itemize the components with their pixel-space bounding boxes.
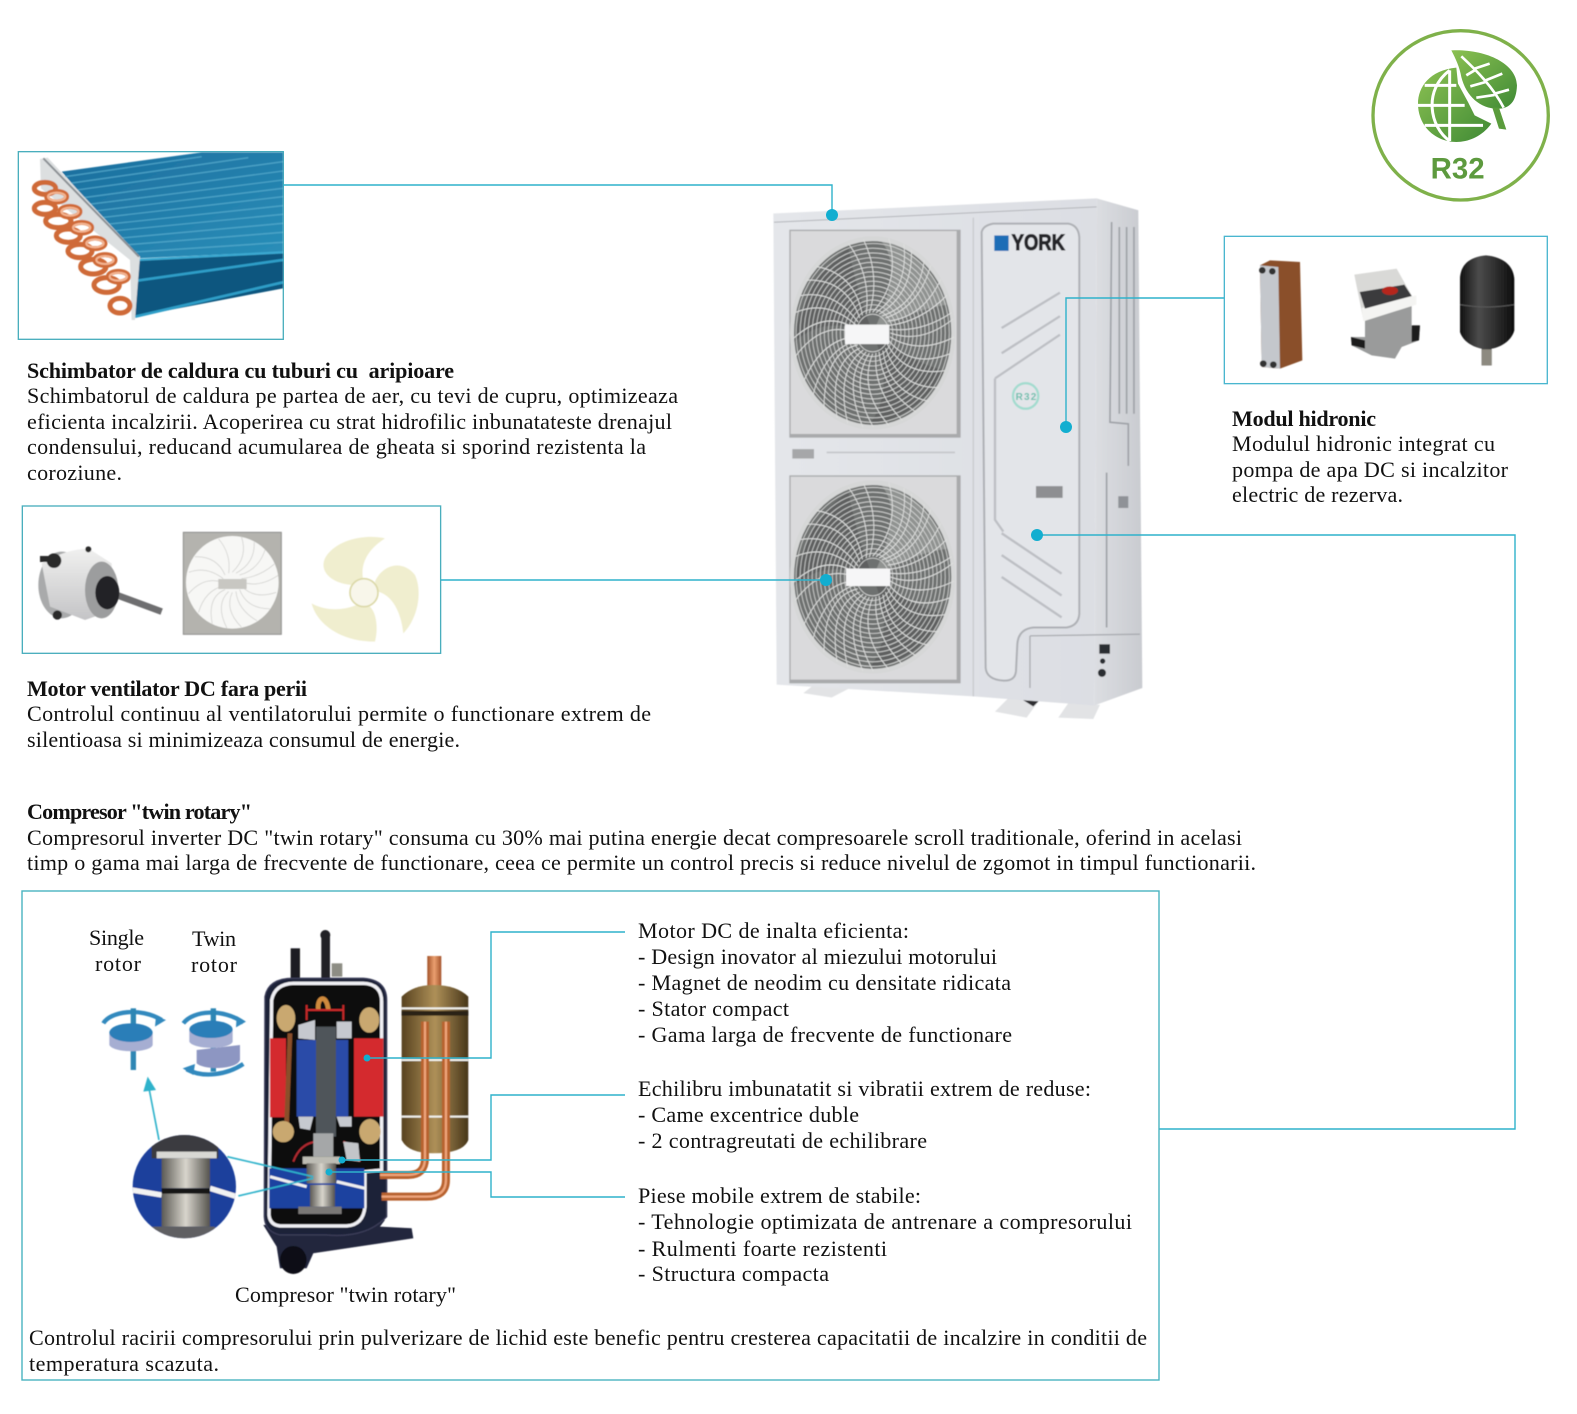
arrow to single rotor — [143, 1077, 159, 1140]
badge label R32: R32 — [1431, 153, 1485, 186]
heading and text: twin rotary compressor: Compresor "twin rotary" — [27, 799, 252, 824]
ports — [1098, 644, 1110, 677]
front face — [773, 198, 1097, 706]
accumulator tank — [402, 956, 468, 1153]
icon: leaf — [1451, 50, 1517, 130]
connector lines with dots — [283, 185, 1515, 1129]
icon: globe — [1418, 68, 1491, 142]
magnifier leader lines — [227, 1157, 313, 1196]
magnified rotor detail — [132, 1135, 238, 1240]
compressor shell — [264, 978, 387, 1235]
feet — [803, 684, 1100, 719]
outdoor unit — [773, 198, 1142, 719]
rotor labels — [89, 925, 238, 977]
feature list: - 2 contragreutati de echilibrare — [638, 1128, 927, 1153]
heading and text: heat exchanger — [27, 358, 678, 485]
heading and text: fan motor: Motor ventilator DC fara perii — [27, 676, 307, 701]
door handle — [1036, 486, 1063, 498]
rotor labels: Twin — [192, 926, 236, 951]
icon: fan grille — [183, 532, 281, 634]
feature list: - Stator compact — [638, 996, 790, 1021]
feature list — [638, 918, 1132, 1286]
discharge pipes — [291, 930, 342, 978]
heat exchanger picture — [34, 152, 283, 320]
cooling note: Controlul racirii compresorului prin pulverizare de lichid este benefic pentru cresterea capacitatii de incalzire in conditii de — [29, 1325, 1147, 1350]
compressor illustration — [103, 930, 468, 1274]
heading and text: twin rotary compressor: timp o gama mai larga de frecvente de functionare, ceea ce permite un control precis si reduce nivelul de zgomot in timpul functionarii. — [27, 850, 1256, 875]
cooling note — [29, 1325, 1147, 1376]
rotor labels: rotor — [191, 952, 238, 977]
motor components picture — [38, 532, 419, 642]
heading and text: hydronic module: pompa de apa DC si incalzitor — [1232, 457, 1509, 482]
heading and text: fan motor: silentioasa si minimizeaza consumul de energie. — [27, 727, 460, 752]
compressor callout lines — [326, 932, 625, 1197]
heading and text: hydronic module: Modulul hidronic integrat cu — [1232, 431, 1495, 456]
icon: expansion vessel — [1460, 255, 1514, 365]
compressor base — [263, 1220, 413, 1268]
heading and text: heat exchanger: condensului, reducand acumularea de gheata si sporind rezistenta la — [27, 434, 646, 459]
brand logo YORK — [994, 230, 1065, 255]
icon: plate heat exchanger — [1259, 260, 1302, 369]
lower fan — [781, 467, 967, 687]
feature list: - Rulmenti foarte rezistenti — [638, 1236, 887, 1261]
brand logo YORK: YORK — [1012, 230, 1065, 255]
heading and text: twin rotary compressor — [27, 799, 1256, 875]
feature list: Piese mobile extrem de stabile: — [638, 1183, 921, 1208]
icon: brushless motor — [38, 546, 162, 620]
feature list: - Magnet de neodim cu densitate ridicata — [638, 970, 1011, 995]
heading and text: hydronic module: Modul hidronic — [1232, 406, 1376, 431]
heading and text: fan motor: Controlul continuu al ventilatorului permite o functionare extrem de — [27, 701, 651, 726]
shell cutaway interior — [269, 983, 382, 1226]
feature list: Motor DC de inalta eficienta: — [638, 918, 909, 943]
R32 sticker — [1013, 383, 1038, 409]
upper fan — [781, 223, 967, 443]
winding ends — [273, 1005, 381, 1144]
icon: fan blade — [312, 537, 419, 642]
aluminium end plate — [40, 158, 140, 320]
heading and text: hydronic module: electric de rezerva. — [1232, 482, 1403, 507]
rotor labels: rotor — [95, 951, 142, 976]
rotor labels: Single — [89, 925, 144, 950]
fin block front — [135, 252, 283, 317]
heading and text: fan motor — [27, 676, 651, 752]
heading and text: heat exchanger: eficienta incalzirii. Acoperirea cu strat hidrofilic inbunatateste drenajul — [27, 409, 672, 434]
panel: hydronic module photos — [1224, 236, 1547, 384]
side face — [1094, 198, 1142, 706]
cooling note: temperatura scazuta. — [29, 1351, 219, 1376]
hydronic components picture — [1259, 255, 1514, 369]
rotor core — [287, 999, 352, 1137]
compressor caption: Compresor "twin rotary" — [235, 1282, 456, 1307]
stator — [270, 1038, 383, 1117]
diagonal grooves — [995, 293, 1062, 617]
panel: heat exchanger photo — [18, 152, 283, 339]
heading and text: hydronic module — [1232, 406, 1509, 507]
feature list: Echilibru imbunatatit si vibratii extrem de reduse: — [638, 1076, 1091, 1101]
panel: fan motor, grille and blade photos — [22, 506, 441, 653]
heading and text: heat exchanger: coroziune. — [27, 460, 122, 485]
heading and text: twin rotary compressor: Compresorul inverter DC "twin rotary" consuma cu 30% mai putina energie decat compresoarele scroll traditionale, oferind in acelasi — [27, 825, 1242, 850]
cylinder section — [269, 1133, 365, 1214]
heading and text: heat exchanger: Schimbator de caldura cu tuburi cu aripioare — [27, 358, 454, 383]
feature list: - Structura compacta — [638, 1261, 829, 1286]
copper suction pipes — [380, 1022, 446, 1197]
icon: R32 eco badge — [1373, 31, 1548, 200]
handle and groove — [792, 449, 814, 459]
feature list: - Gama larga de frecvente de functionare — [638, 1022, 1012, 1047]
icon: single rotor — [103, 1008, 166, 1070]
door panel outline — [982, 224, 1079, 681]
icon: circulation pump — [1351, 269, 1420, 359]
copper coils — [34, 182, 130, 313]
fin block top — [62, 152, 283, 258]
feature list: - Design inovator al miezului motorului — [638, 944, 997, 969]
R32 sticker: R32 — [1016, 392, 1037, 403]
panel: compressor details — [22, 891, 1159, 1380]
feature list: - Came excentrice duble — [638, 1102, 859, 1127]
icon: twin rotor — [183, 1008, 246, 1075]
heading and text: heat exchanger: Schimbatorul de caldura pe partea de aer, cu tevi de cupru, optimizeaza — [27, 383, 678, 408]
feature list: - Tehnologie optimizata de antrenare a compresorului — [638, 1209, 1132, 1234]
foot shadow — [1020, 698, 1040, 707]
side details — [1107, 222, 1134, 627]
